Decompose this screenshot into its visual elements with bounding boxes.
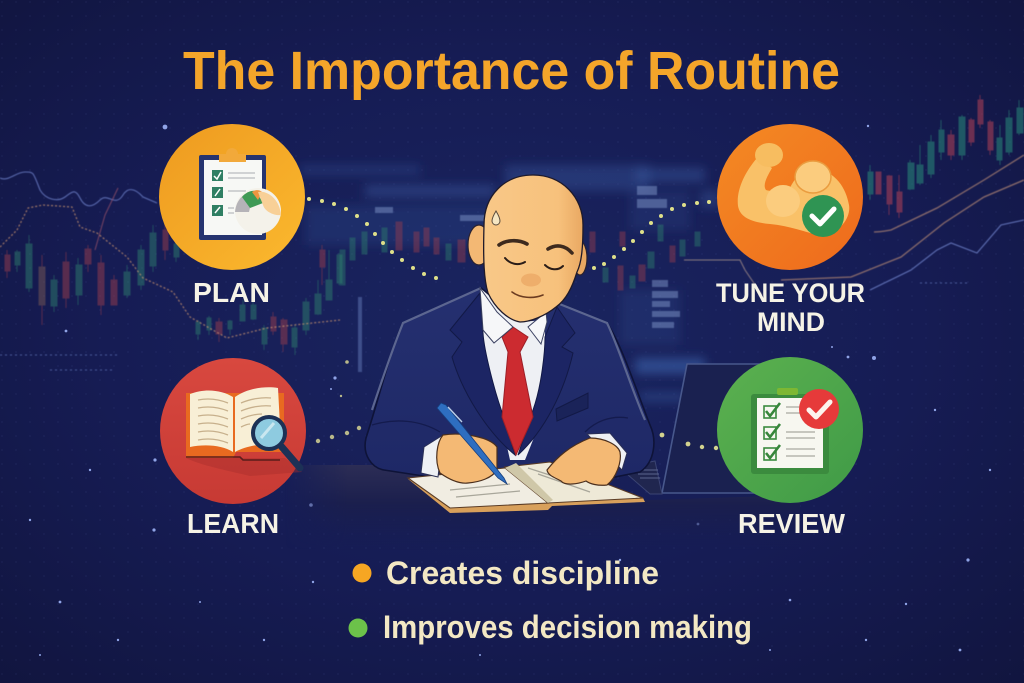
label: review: REVIEW (738, 508, 846, 539)
plan: pie chart (235, 188, 281, 234)
price lines right (684, 155, 1024, 295)
review: red check badge (799, 389, 839, 429)
label: plan: PLAN (193, 277, 270, 308)
bullet: improves decision making: Improves decision making (383, 609, 752, 645)
panel: tune your mind (717, 124, 863, 270)
blurred data text blocks (375, 186, 680, 328)
learn: book (186, 387, 284, 460)
blurred trading screens behind the man (300, 165, 720, 402)
review: circle (717, 357, 863, 503)
man: suit jacket (365, 288, 654, 480)
learn: magnifying glass (253, 417, 300, 468)
shirt cuffs (421, 433, 627, 477)
price lines left (0, 172, 340, 370)
left candlestick chart (5, 225, 342, 355)
man: sweat drop (492, 211, 500, 225)
learn: circle (160, 358, 306, 504)
bullet: creates discipline: Creates discipline (386, 555, 659, 591)
resting hand (547, 438, 620, 485)
man: tie (502, 327, 533, 455)
vertical light streak (358, 297, 362, 372)
man: pocket (556, 393, 588, 421)
right candlestick chart (868, 95, 1023, 218)
dotted connector: plan to man (307, 197, 438, 280)
label: tune your mind: MIND (757, 307, 825, 337)
man at desk (365, 175, 654, 480)
desk (309, 465, 800, 534)
open notebook (408, 462, 645, 513)
tune: flexed arm (738, 143, 849, 236)
man: eyebrows (499, 241, 572, 253)
man: shirt (480, 288, 545, 460)
panel: plan (159, 124, 305, 270)
man: collar (480, 288, 547, 344)
label: tune your mind (716, 278, 865, 337)
man: left lapel (450, 293, 515, 455)
tune: circle (717, 124, 863, 270)
man: sleeve creases (372, 417, 628, 432)
title: The Importance of Routine (183, 41, 840, 101)
middle candlesticks (340, 222, 700, 290)
man: shoulder highlight (372, 288, 645, 420)
man: head (484, 175, 583, 322)
label: learn: LEARN (187, 508, 279, 539)
man: right lapel (518, 307, 575, 455)
dotted connector: learn to man (316, 360, 361, 443)
plan: clipboard (199, 148, 266, 240)
review: clipboard (751, 388, 829, 474)
plan: circle (159, 124, 305, 270)
man: ear left (468, 225, 490, 265)
pen (437, 403, 507, 484)
man: closed eyes (505, 258, 563, 269)
laptop (620, 364, 770, 494)
man: ear right (573, 241, 587, 275)
panel: review (717, 357, 863, 503)
dotted connector: review to man (660, 433, 718, 450)
man: nose (521, 274, 541, 286)
tune: green check badge (802, 195, 844, 237)
label: tune your mind: TUNE YOUR (716, 278, 865, 308)
writing hand (437, 434, 497, 483)
dotted connector: tune your mind to man (592, 200, 711, 270)
panel: learn (160, 358, 306, 504)
learn: book shadow (186, 458, 302, 476)
background stars (29, 125, 991, 656)
man: smile (512, 292, 543, 297)
